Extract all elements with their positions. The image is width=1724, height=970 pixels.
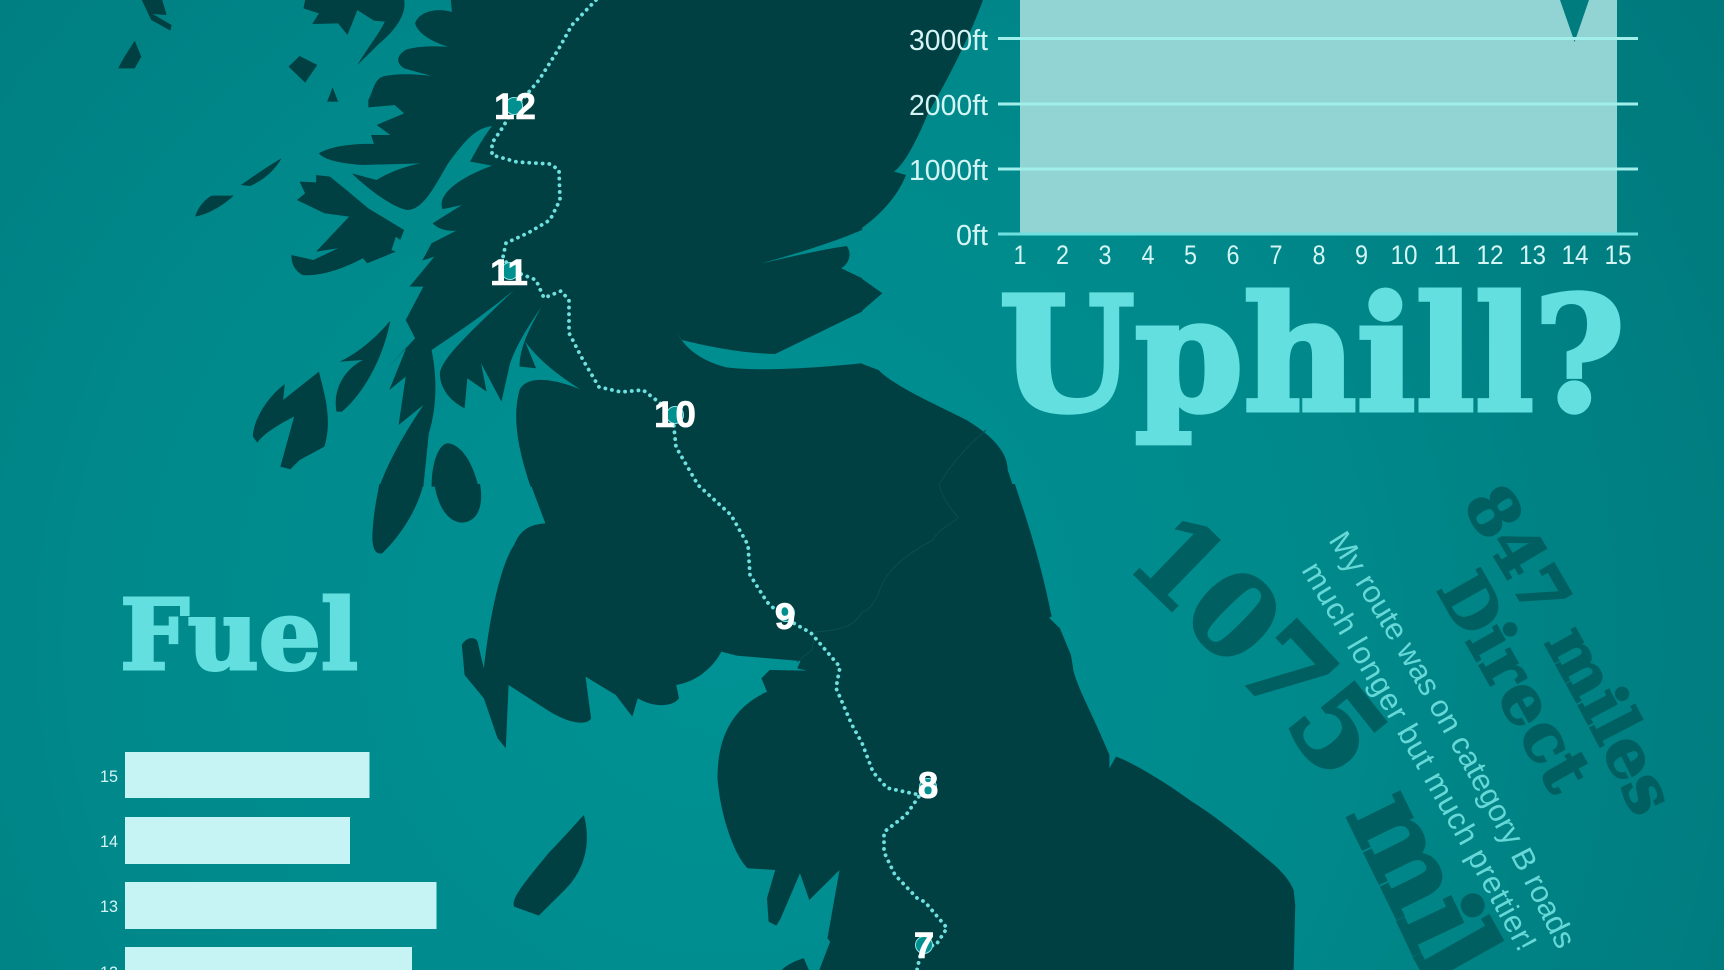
map: regional border line [797,430,986,662]
chart: day labels: 11 [1434,240,1460,270]
fuel bar chart [100,752,436,970]
route stop 9: 9 [775,596,795,637]
chart: day labels [1014,240,1632,270]
route: dotted line [492,0,947,970]
chart: day labels: 12 [1476,240,1504,270]
chart: elevation area [1020,0,1617,233]
chart: altitude labels: 2000ft [909,90,988,122]
chart: day labels: 3 [1098,240,1112,270]
distance: 847 miles: 847 miles [1468,486,1665,814]
fuel bar labels: 14 [100,832,118,851]
chart: altitude labels [909,25,988,252]
chart: gridlines [998,38,1638,234]
chart: day labels: 15 [1604,240,1632,270]
note: route line 1: My route was on category B roads [1329,530,1571,948]
chart: day labels: 4 [1142,240,1154,270]
chart: day labels: 8 [1312,240,1326,270]
route stop 10: 10 [654,394,696,435]
map: south-west quadrant coastline and islands [372,484,864,970]
chart: day labels: 14 [1562,240,1588,270]
note: route line 2: much longer but much prettier! [1302,563,1537,951]
chart: day labels: 9 [1355,240,1368,270]
chart: day labels: 1 [1014,240,1026,270]
chart: altitude labels: 1000ft [909,155,988,187]
heading: Fuel: Fuel [120,578,358,692]
fuel bars [125,752,436,970]
elevation chart [909,0,1638,270]
chart: altitude labels: 0ft [956,220,988,252]
chart: day labels: 10 [1390,240,1418,270]
chart: day labels: 7 [1270,240,1282,270]
fuel bar labels [100,767,118,970]
chart: day labels: 6 [1226,240,1240,270]
map: north-east quadrant coastline [860,0,1013,487]
chart: altitude labels: 3000ft [909,25,988,57]
chart: day labels: 5 [1184,240,1197,270]
map: north-west quadrant landmass and islands [118,0,862,487]
fuel bar labels: 13 [100,897,118,916]
heading: Uphill?: Uphill? [999,263,1625,448]
route stop 11: 11 [490,252,528,293]
route stop 8: 8 [918,765,938,806]
route stop 7: 7 [914,925,934,966]
label: Direct: Direct [1436,566,1588,794]
route stop 12: 12 [494,86,536,127]
map: south-east quadrant coastline [860,484,1295,970]
map of northern Britain [118,0,1295,970]
fuel bar labels: 15 [100,767,118,786]
chart: day labels: 13 [1519,240,1546,270]
chart: day labels: 2 [1056,240,1069,270]
